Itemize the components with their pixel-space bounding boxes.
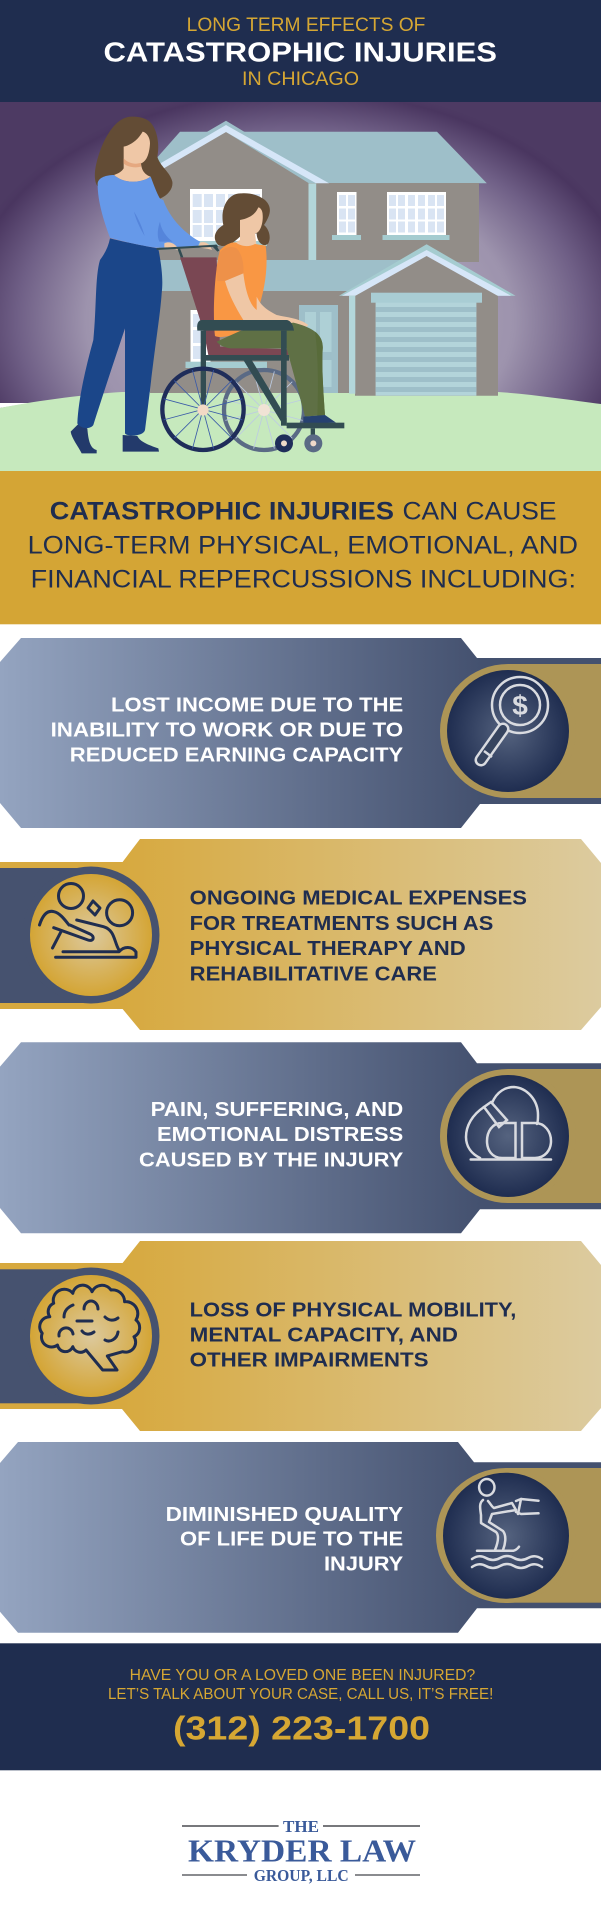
lower left window bbox=[186, 310, 267, 368]
icon: magnifying glass with dollar bbox=[481, 677, 548, 760]
call to action band bbox=[0, 1643, 601, 1770]
chair back and seat bbox=[180, 257, 288, 355]
standing woman bbox=[71, 117, 212, 453]
text: medical expenses: FOR TREATMENTS SUCH AS bbox=[190, 913, 493, 935]
text: loss of mobility: LOSS OF PHYSICAL MOBILITY, bbox=[190, 1300, 516, 1322]
text: lost income: LOST INCOME DUE TO THE bbox=[111, 695, 403, 717]
text: pain and suffering: EMOTIONAL DISTRESS bbox=[157, 1124, 403, 1146]
garage bbox=[339, 244, 516, 396]
panel: medical expenses bbox=[0, 839, 601, 1030]
phone number: (312) 223-1700 bbox=[173, 1709, 430, 1746]
icon: water skier bbox=[472, 1479, 542, 1568]
intro text: LONG-TERM PHYSICAL, EMOTIONAL, AND bbox=[28, 531, 578, 559]
people and wheelchair bbox=[71, 117, 344, 453]
intro text bbox=[28, 497, 578, 593]
icon: magnifying glass with dollar: $ bbox=[512, 690, 528, 721]
text: loss of mobility: MENTAL CAPACITY, AND bbox=[190, 1325, 458, 1347]
text: quality of life: DIMINISHED QUALITY bbox=[166, 1504, 404, 1526]
logo: KRYDER LAW bbox=[188, 1833, 416, 1869]
intro text: CATASTROPHIC INJURIES bbox=[50, 497, 394, 525]
text: lost income: INABILITY TO WORK OR DUE TO bbox=[51, 720, 403, 742]
header band bbox=[0, 0, 601, 102]
panel: loss of mobility bbox=[0, 1241, 601, 1431]
logo: GROUP, LLC bbox=[254, 1866, 349, 1885]
back wheel bbox=[224, 370, 304, 450]
intro band bbox=[0, 471, 601, 624]
text: medical expenses bbox=[190, 887, 527, 986]
text: quality of life: INJURY bbox=[324, 1554, 404, 1576]
icon: pills bbox=[466, 1087, 551, 1160]
text: loss of mobility: OTHER IMPAIRMENTS bbox=[190, 1350, 428, 1372]
upper middle window bbox=[332, 192, 361, 240]
front wheel bbox=[162, 369, 244, 450]
text: quality of life bbox=[166, 1504, 404, 1576]
panel: quality of life bbox=[0, 1442, 601, 1633]
call to action text line 2: LET’S TALK ABOUT YOUR CASE, CALL US, IT’S FREE! bbox=[108, 1686, 493, 1703]
white sliver at lawn edge bbox=[0, 403, 30, 408]
logo bbox=[182, 1817, 420, 1885]
text: quality of life: OF LIFE DUE TO THE bbox=[180, 1529, 403, 1551]
front door bbox=[299, 305, 338, 393]
intro text: FINANCIAL REPERCUSSIONS INCLUDING: bbox=[31, 565, 576, 593]
wheelchair frame bbox=[157, 245, 344, 437]
illustration panel bbox=[0, 102, 601, 471]
call to action text: HAVE YOU OR A LOVED ONE BEEN INJURED? bbox=[130, 1667, 476, 1684]
heading: long term effects of: LONG TERM EFFECTS OF bbox=[187, 15, 425, 36]
panel: pain and suffering bbox=[0, 1042, 601, 1233]
text: pain and suffering bbox=[139, 1099, 404, 1172]
seated woman bbox=[214, 193, 336, 424]
house bbox=[150, 121, 516, 396]
icon: brain bbox=[40, 1285, 140, 1370]
upper right window bbox=[382, 192, 450, 240]
text: loss of mobility bbox=[190, 1300, 516, 1372]
heading: catastrophic injuries: CATASTROPHIC INJURIES bbox=[104, 36, 497, 67]
logo: THE bbox=[283, 1817, 319, 1836]
text: pain and suffering: CAUSED BY THE INJURY bbox=[139, 1150, 404, 1172]
panel: lost income bbox=[0, 638, 601, 828]
text: lost income: REDUCED EARNING CAPACITY bbox=[70, 745, 404, 767]
text: medical expenses: ONGOING MEDICAL EXPENSES bbox=[190, 887, 527, 909]
text: medical expenses: REHABILITATIVE CARE bbox=[190, 964, 437, 986]
text: medical expenses: PHYSICAL THERAPY AND bbox=[190, 938, 466, 960]
intro text: CAN CAUSE bbox=[402, 497, 556, 525]
heading: in chicago: IN CHICAGO bbox=[242, 69, 359, 90]
text: pain and suffering: PAIN, SUFFERING, AND bbox=[151, 1099, 403, 1121]
lawn bbox=[0, 392, 601, 471]
text: lost income bbox=[51, 695, 404, 767]
icon: physical therapy bbox=[40, 884, 136, 957]
upper left window bbox=[183, 189, 267, 246]
caster wheels bbox=[275, 434, 322, 452]
